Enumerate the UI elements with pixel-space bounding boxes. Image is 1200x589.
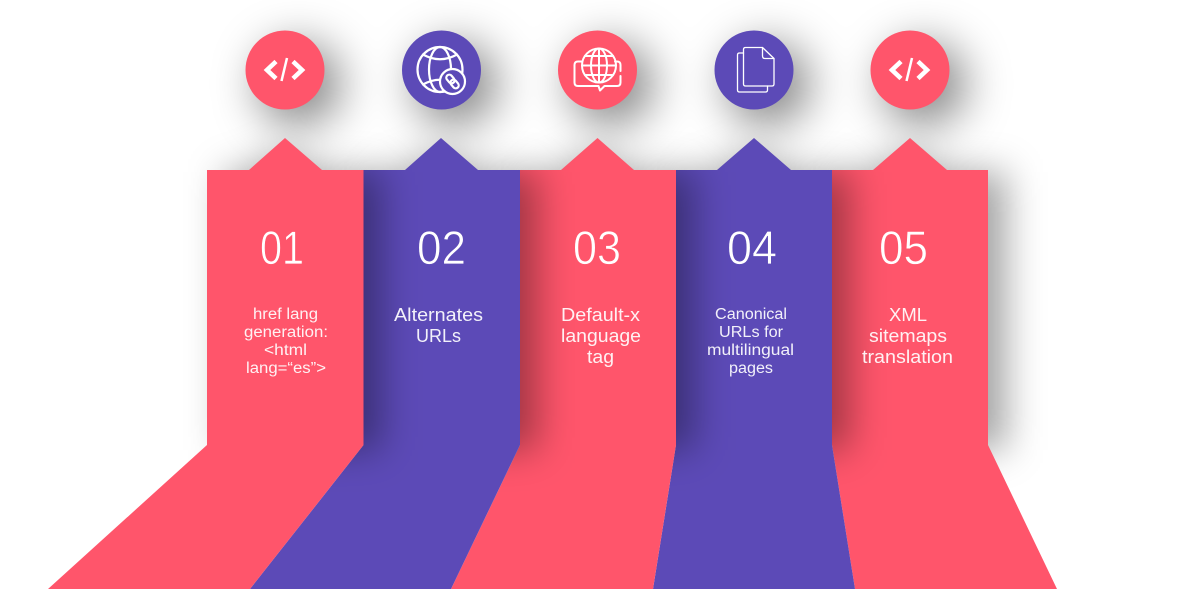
icon: code badge 5 [870, 30, 950, 110]
panel: column 05 [832, 138, 1057, 589]
panel: column 02 [250, 138, 538, 589]
panel: column 04 [653, 138, 855, 589]
icon: globe in speech bubble [558, 30, 637, 110]
label: href lang generation: <html [264, 342, 307, 359]
number 01: 01 [260, 221, 304, 274]
label: href lang generation: lang=“es”> [246, 360, 326, 377]
label: canonical URLs for multilingual pages [707, 306, 794, 377]
label: canonical URLs for multilingual pages: Canonical [715, 306, 787, 323]
number 03: 03 [573, 221, 621, 274]
icon: code badge 1 [246, 30, 324, 110]
label: href lang generation: href lang [253, 306, 318, 323]
label: XML sitemaps translation: XML [889, 305, 927, 325]
label: href lang generation: generation: [244, 324, 328, 341]
label: XML sitemaps translation: sitemaps [869, 326, 947, 346]
label: alternates URLs: URLs [416, 326, 461, 346]
label: XML sitemaps translation [862, 305, 953, 367]
number 04: 04 [727, 221, 777, 274]
label: default-x language tag: tag [587, 347, 614, 367]
column 03 text [561, 221, 641, 367]
label: default-x language tag [561, 305, 641, 367]
label: href lang generation [244, 306, 328, 377]
column 05 text [862, 221, 953, 367]
label: default-x language tag: language [561, 326, 641, 346]
column 04 text [707, 221, 794, 377]
icon: globe with link badge [402, 30, 481, 110]
label: default-x language tag: Default-x [561, 305, 640, 325]
column 01 text [244, 221, 328, 377]
number 05: 05 [879, 221, 928, 274]
panel: column 03 [451, 138, 694, 589]
label: alternates URLs [394, 305, 483, 346]
icon: documents [714, 30, 794, 110]
number 02: 02 [417, 221, 466, 274]
label: XML sitemaps translation: translation [862, 347, 953, 367]
column 02 text [394, 221, 483, 346]
label: canonical URLs for multilingual pages: multilingual [707, 342, 794, 359]
label: canonical URLs for multilingual pages: URLs for [719, 324, 783, 341]
label: canonical URLs for multilingual pages: pages [729, 360, 773, 377]
panel: column 01 [48, 138, 381, 589]
label: alternates URLs: Alternates [394, 305, 483, 325]
